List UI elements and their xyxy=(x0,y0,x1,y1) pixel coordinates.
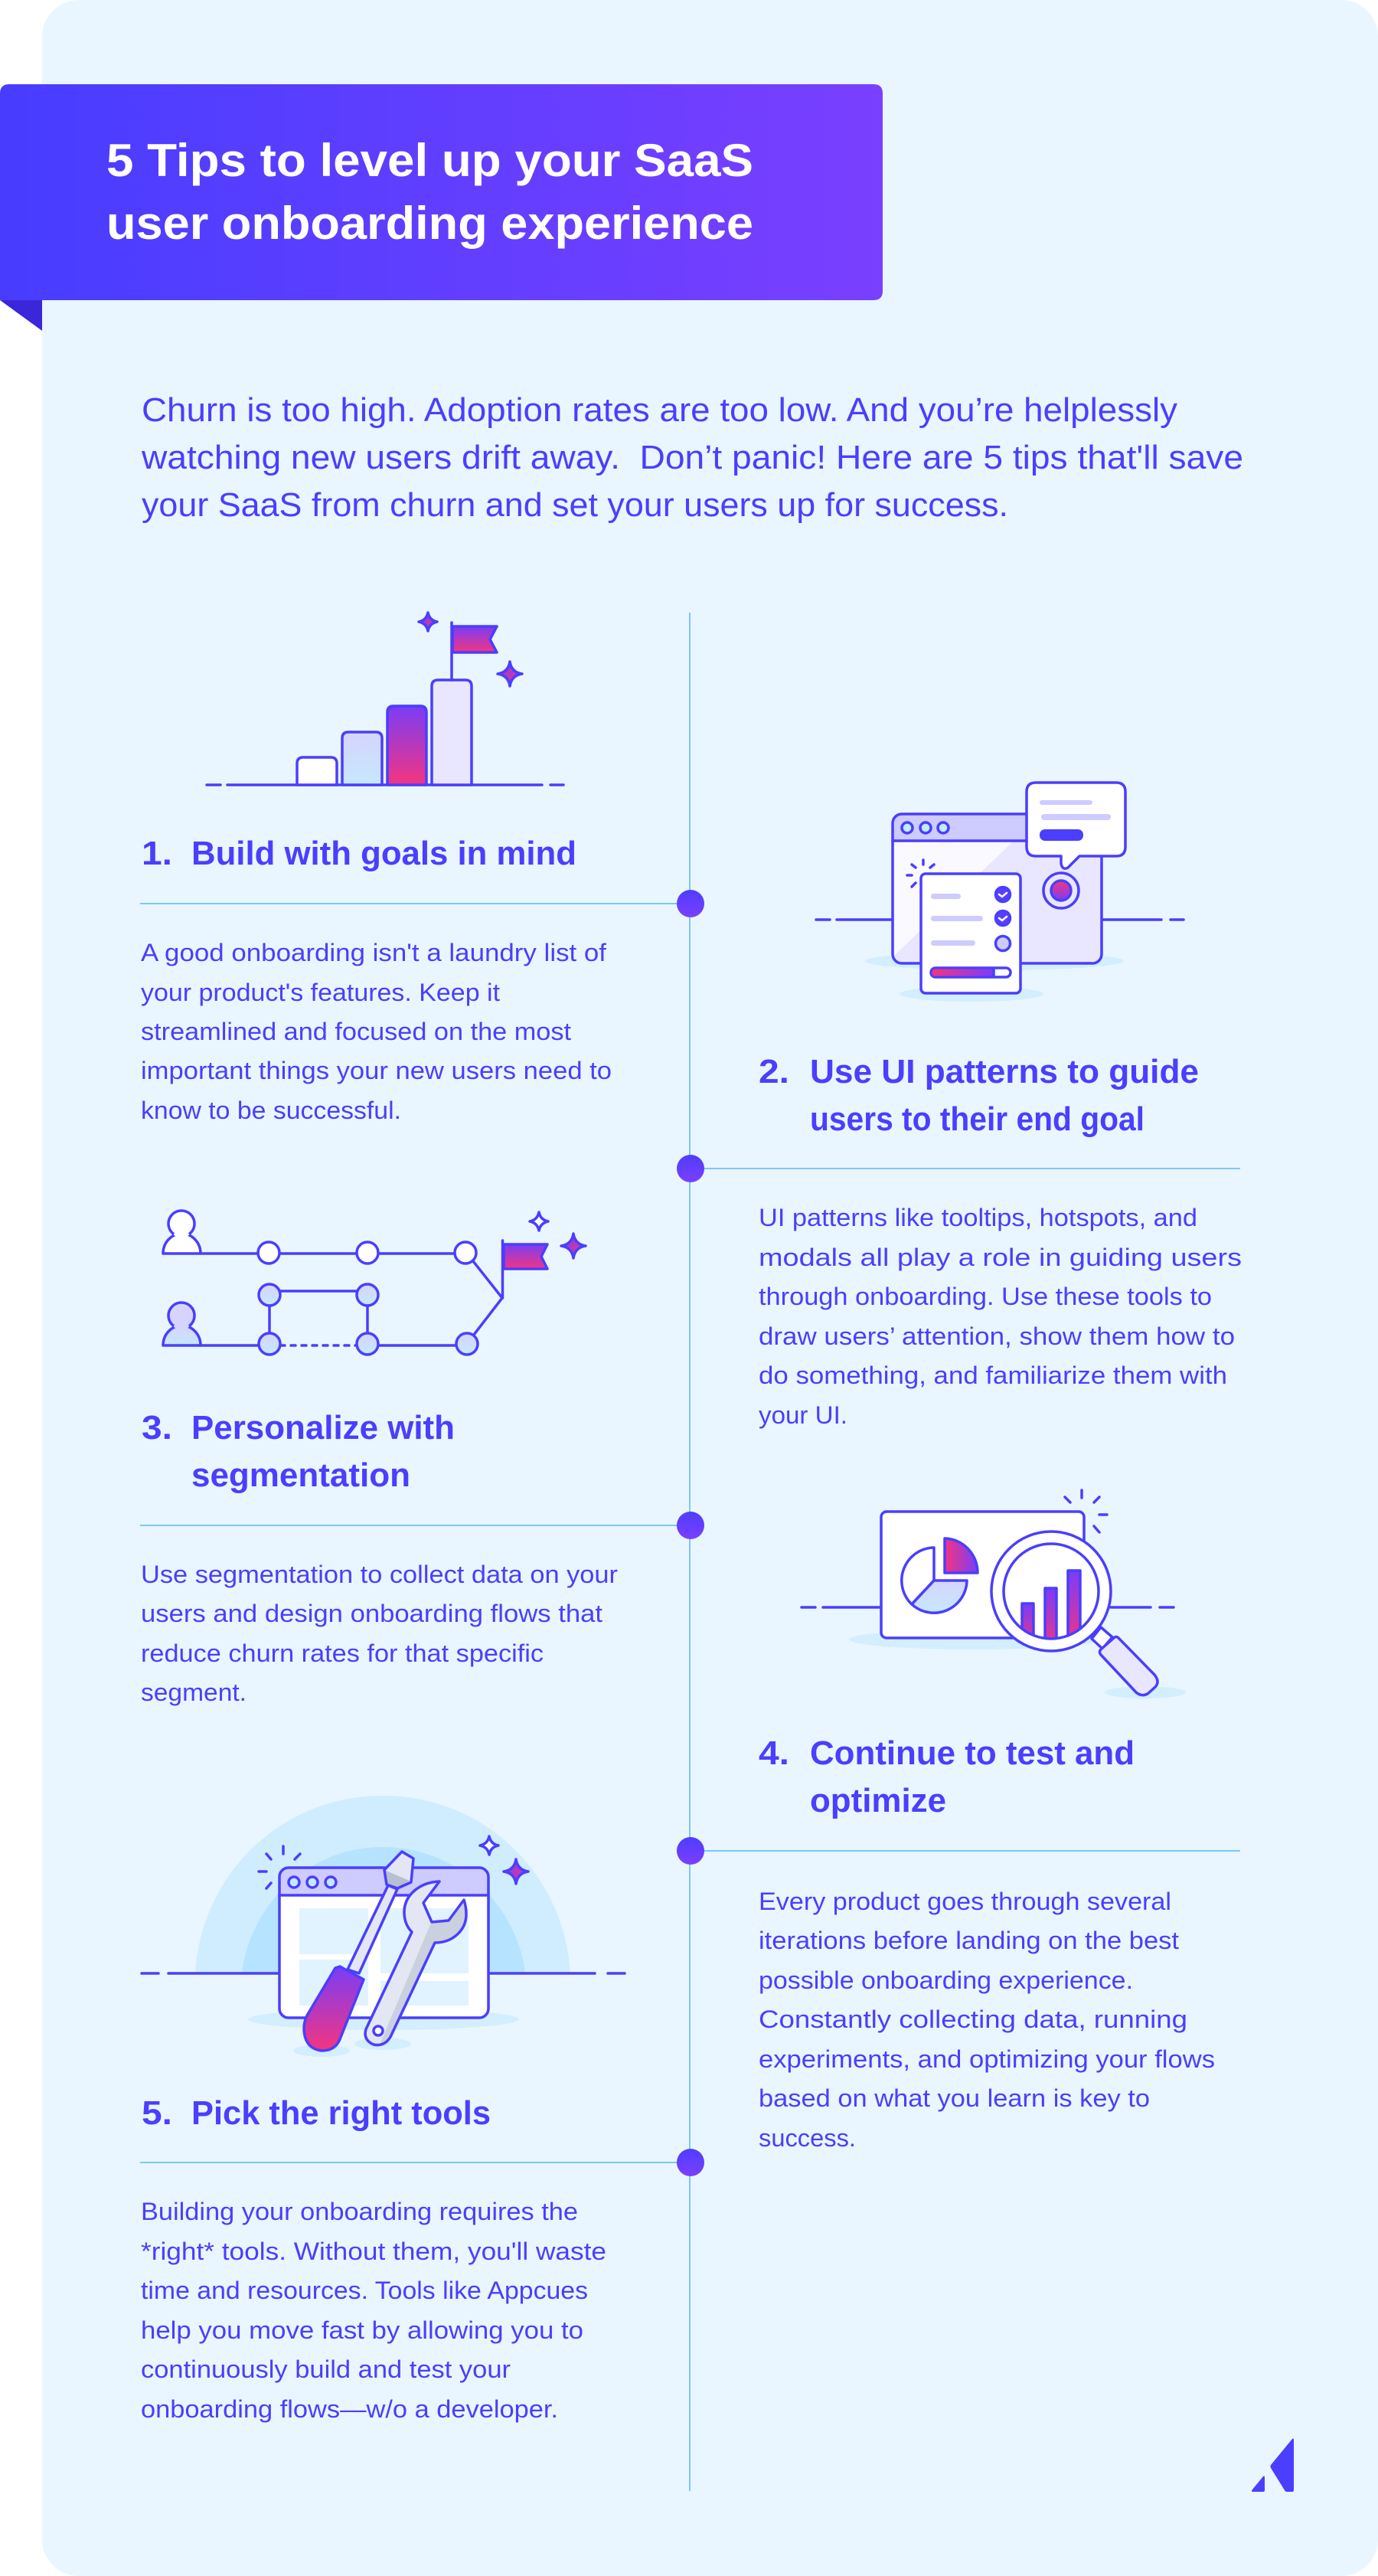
intro paragraph: watching new users drift away. Don’t panic! Here are 5 tips that'll save xyxy=(141,439,1243,476)
body 3: segment. xyxy=(141,1679,247,1706)
heading 3 xyxy=(142,1409,455,1494)
body 2: your UI. xyxy=(759,1401,847,1429)
intro paragraph: your SaaS from churn and set your users up for success. xyxy=(142,486,1008,524)
rule and dot 3 xyxy=(140,1512,704,1539)
heading 1: 1. xyxy=(142,835,172,872)
heading 5: 5. xyxy=(142,2094,172,2132)
body 1: A good onboarding isn't a laundry list of xyxy=(141,939,606,966)
tip 5 xyxy=(140,2094,704,2423)
body 4: Constantly collecting data, running xyxy=(759,2006,1187,2033)
heading 2 xyxy=(759,1053,1199,1138)
icon: analytics with magnifier xyxy=(802,1490,1186,1698)
heading 1: Build with goals in mind xyxy=(191,835,576,872)
body 4: based on what you learn is key to xyxy=(759,2084,1150,2112)
heading 2: users to their end goal xyxy=(810,1100,1145,1138)
heading 4: Continue to test and xyxy=(810,1734,1135,1772)
heading 3: segmentation xyxy=(191,1456,410,1494)
body 5: continuously build and test your xyxy=(141,2355,511,2383)
icon: UI patterns window xyxy=(816,783,1184,1002)
body 3: reduce churn rates for that specific xyxy=(141,1639,544,1667)
heading 3: 3. xyxy=(142,1409,172,1447)
body 2: do something, and familiarize them with xyxy=(759,1362,1227,1389)
body 4: success. xyxy=(759,2124,856,2152)
body 5: Building your onboarding requires the xyxy=(141,2198,578,2225)
body 5: time and resources. Tools like Appcues xyxy=(141,2277,588,2304)
tip 4 xyxy=(677,1734,1240,2152)
body 1 xyxy=(141,939,612,1124)
rule and dot 1 xyxy=(140,890,704,917)
tip 1 xyxy=(140,835,704,1124)
body 5: onboarding flows—w/o a developer. xyxy=(141,2395,558,2423)
intro paragraph: Churn is too high. Adoption rates are too low. And you’re helplessly xyxy=(142,391,1177,429)
intro paragraph xyxy=(141,391,1243,524)
body 1: streamlined and focused on the most xyxy=(141,1018,571,1045)
body 2 xyxy=(759,1204,1242,1429)
icon: Appcues logo xyxy=(1252,2438,1294,2492)
body 4 xyxy=(759,1888,1215,2152)
title banner xyxy=(0,84,883,331)
banner fold xyxy=(0,300,42,331)
banner body xyxy=(0,84,883,300)
icon: bar chart with flag xyxy=(207,613,563,785)
body 4: Every product goes through several xyxy=(759,1888,1171,1915)
title: 5 Tips to level up your SaaS xyxy=(106,135,753,186)
body 3 xyxy=(141,1561,618,1706)
body 2: through onboarding. Use these tools to xyxy=(759,1283,1212,1310)
body 4: possible onboarding experience. xyxy=(759,1966,1133,1994)
body 5: *right* tools. Without them, you'll waste xyxy=(141,2238,606,2265)
heading 2: Use UI patterns to guide xyxy=(810,1053,1199,1090)
title xyxy=(106,135,753,249)
body 1: your product's features. Keep it xyxy=(141,979,500,1006)
body 4: experiments, and optimizing your flows xyxy=(759,2045,1215,2073)
heading 3: Personalize with xyxy=(191,1409,455,1447)
icon: tools over window xyxy=(142,1796,625,2057)
body 2: UI patterns like tooltips, hotspots, and xyxy=(759,1204,1197,1231)
heading 4 xyxy=(759,1734,1135,1819)
heading 4: optimize xyxy=(810,1782,946,1819)
tip 2 xyxy=(677,1053,1242,1429)
heading 5: Pick the right tools xyxy=(191,2094,491,2132)
rule and dot 2 xyxy=(677,1155,1240,1182)
icon: segmentation paths xyxy=(163,1211,586,1355)
body 5 xyxy=(141,2198,606,2423)
body 1: know to be successful. xyxy=(141,1097,401,1124)
rule and dot 4 xyxy=(677,1837,1240,1865)
body 3: users and design onboarding flows that xyxy=(141,1600,602,1627)
tip 3 xyxy=(140,1409,704,1706)
heading 4: 4. xyxy=(759,1734,789,1772)
body 2: modals all play a role in guiding users xyxy=(759,1244,1242,1271)
timeline vertical line xyxy=(689,613,691,2491)
body 4: iterations before landing on the best xyxy=(759,1927,1179,1954)
body 5: help you move fast by allowing you to xyxy=(141,2316,583,2344)
body 1: important things your new users need to xyxy=(141,1057,612,1084)
title: user onboarding experience xyxy=(106,198,753,249)
body 3: Use segmentation to collect data on your xyxy=(141,1561,618,1588)
rule and dot 5 xyxy=(140,2149,704,2176)
heading 2: 2. xyxy=(759,1053,789,1090)
body 2: draw users’ attention, show them how to xyxy=(759,1322,1235,1350)
